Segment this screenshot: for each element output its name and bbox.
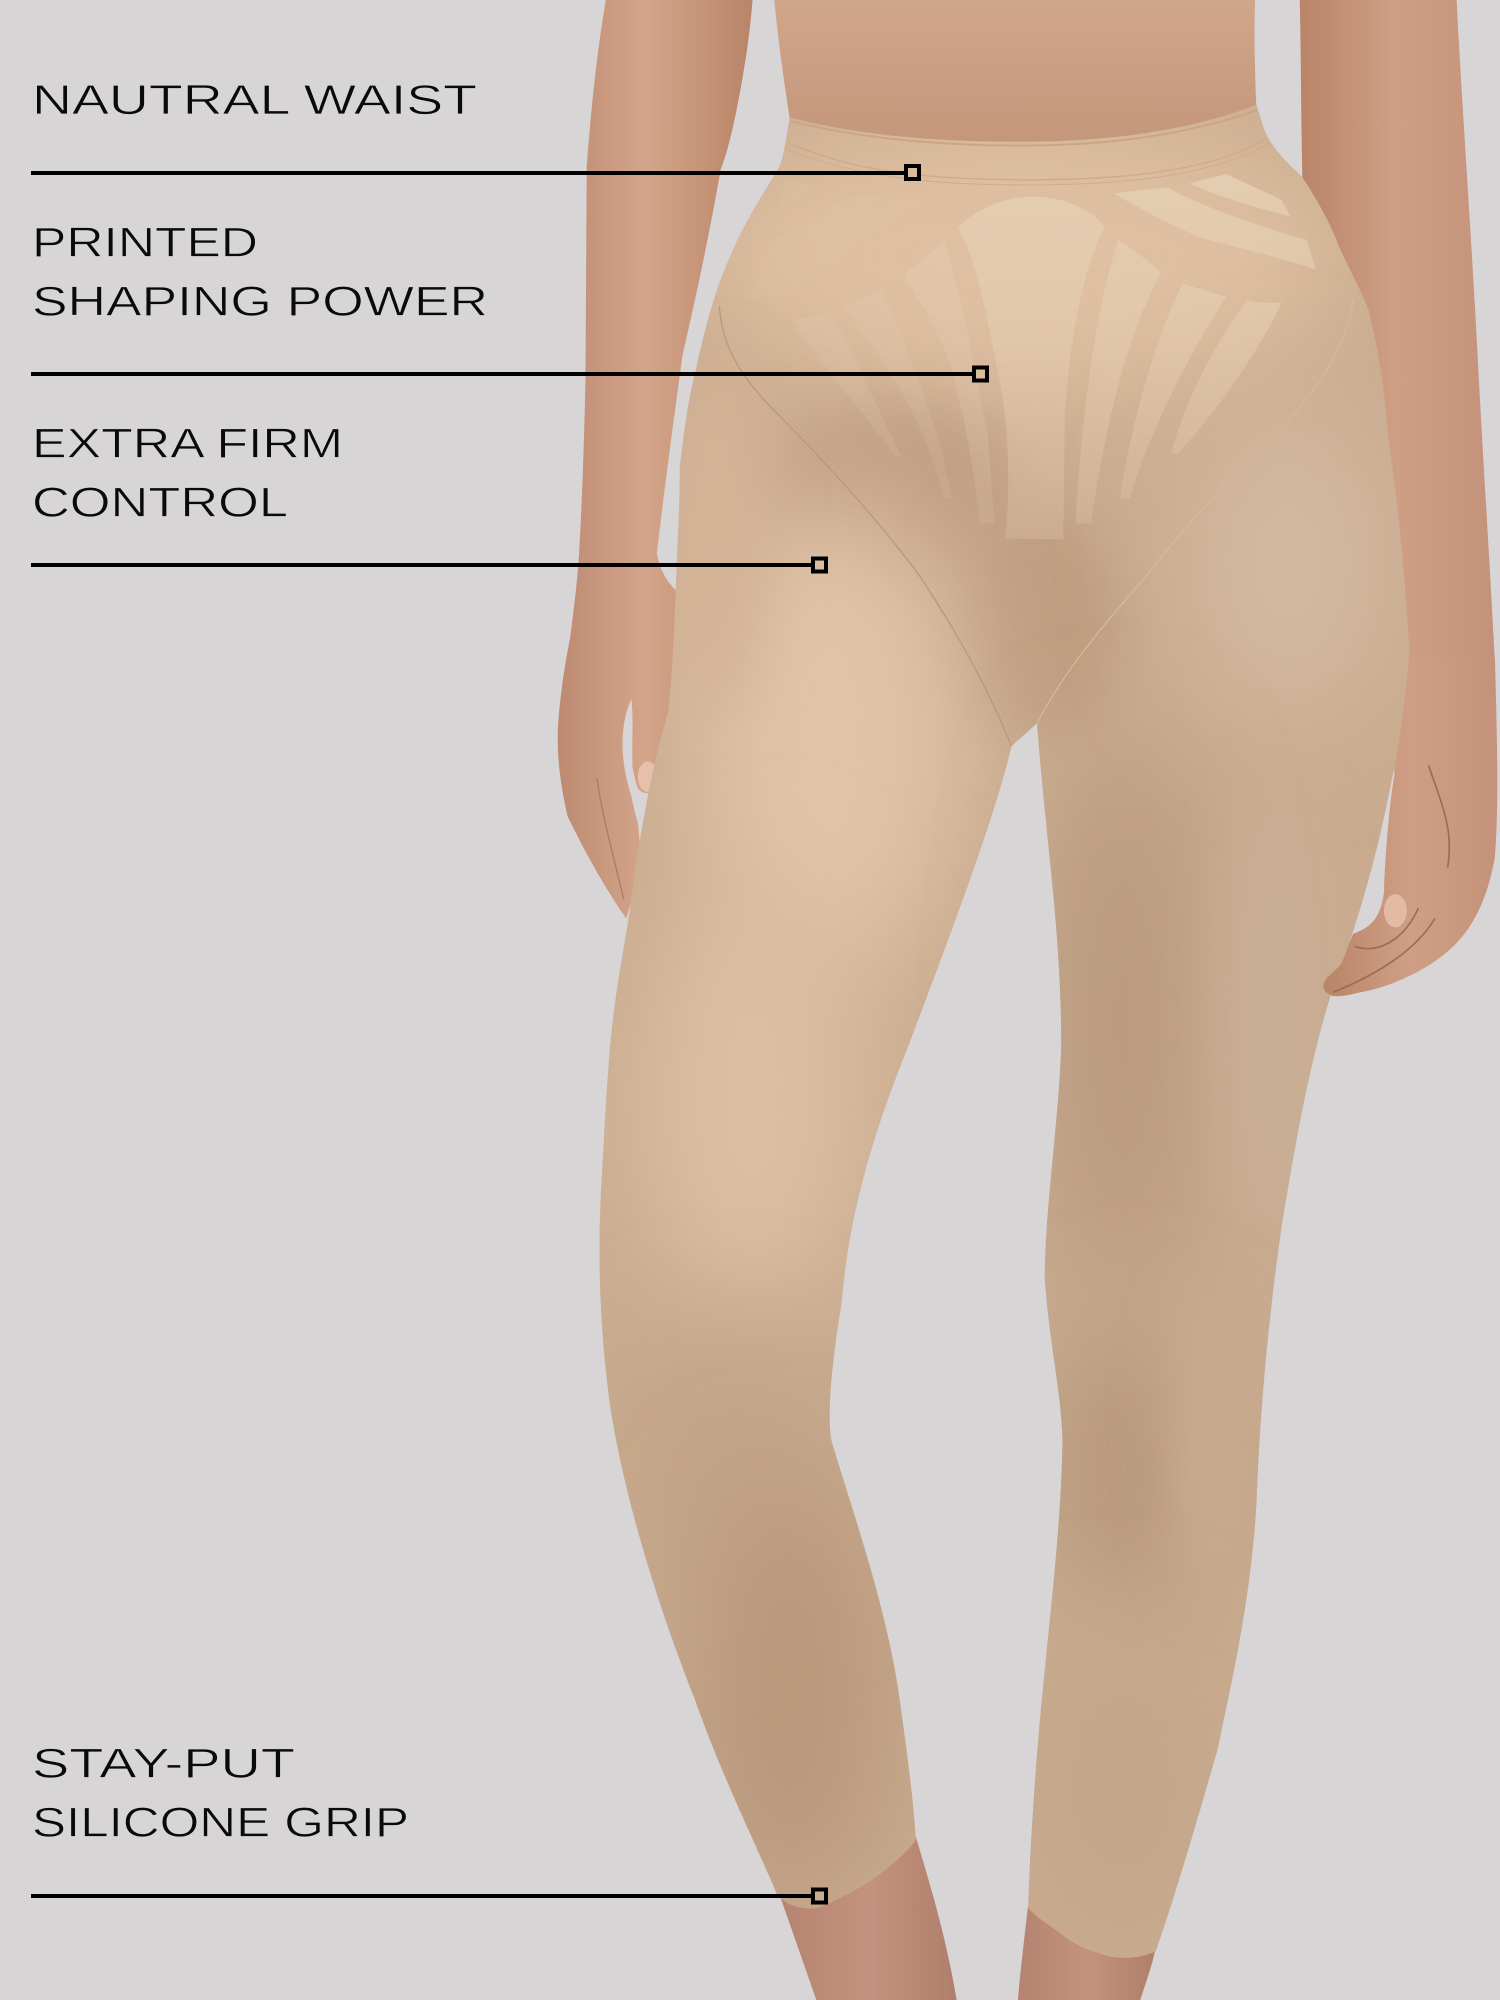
label: NAUTRAL WAIST <box>32 76 477 123</box>
seams and stitching <box>719 110 1353 746</box>
left knee and calf shadow <box>612 1395 844 1564</box>
torso skin <box>774 0 1256 147</box>
marker <box>813 1890 826 1902</box>
callout: extra firm control <box>31 420 826 572</box>
right rays <box>1076 240 1161 523</box>
callout: stay-put silicone grip <box>31 1740 826 1902</box>
right thumb nail <box>1384 894 1407 927</box>
shaping print panels <box>753 174 1316 539</box>
leader line <box>31 1894 813 1898</box>
top right bands <box>1114 187 1316 269</box>
callout: extra firm control: CONTROL <box>32 478 288 526</box>
label: EXTRA FIRM <box>32 420 343 466</box>
faint left hip bands <box>763 190 900 257</box>
left leg seam <box>719 306 1011 746</box>
left calf <box>779 1837 957 2000</box>
callout: natural waist <box>31 76 919 179</box>
left arm and hand <box>558 0 753 918</box>
gap between left fingers <box>623 699 651 822</box>
left finger crease <box>597 778 624 899</box>
label: PRINTED <box>32 218 258 266</box>
leader line <box>31 171 905 175</box>
callout: stay-put silicone grip: SILICONE GRIP <box>32 1798 409 1846</box>
calves <box>779 1837 1156 2000</box>
pelvis shadow <box>800 403 1004 536</box>
marker <box>813 558 826 572</box>
hand shape <box>1323 657 1497 996</box>
waistband top lip <box>791 110 1258 146</box>
model figure <box>548 0 1497 2000</box>
waistband stitch line <box>788 138 1267 180</box>
outer hip tone <box>676 412 741 588</box>
leggings <box>600 104 1410 1958</box>
right hand <box>1323 657 1497 996</box>
leader line <box>31 563 813 567</box>
right calf <box>1018 1906 1156 2000</box>
right leg seam <box>1037 300 1353 723</box>
marker <box>906 166 919 179</box>
leggings base <box>600 104 1409 1958</box>
left rays <box>904 242 994 523</box>
callout: printed shaping power: SHAPING POWER <box>32 278 488 324</box>
left thigh highlight <box>689 497 969 982</box>
right arm <box>1300 0 1495 816</box>
label: STAY-PUT <box>32 1740 295 1786</box>
leader line <box>31 372 973 376</box>
callout: printed shaping power <box>31 218 987 380</box>
center dome panel <box>958 197 1105 539</box>
right knee and calf tones <box>1054 1341 1177 1591</box>
right thigh tones <box>1186 395 1390 727</box>
left thumb nail <box>638 761 658 792</box>
marker <box>974 368 987 380</box>
hip highlight <box>689 115 1352 395</box>
finger creases <box>1333 765 1449 992</box>
body and leggings <box>548 0 1495 2000</box>
